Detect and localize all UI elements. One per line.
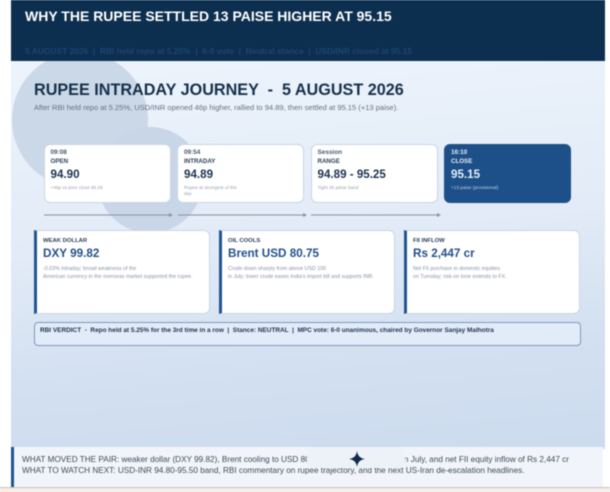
driver: weak dollar — [34, 230, 210, 314]
card: range: RANGE — [318, 158, 340, 165]
driver: oil cools: Brent USD 80.75 — [228, 246, 319, 260]
bottom strip — [0, 487, 610, 492]
card: intraday — [177, 144, 304, 203]
driver: oil cools: in July; lower crude eases India's import bill and supports INR. — [228, 274, 374, 280]
driver: oil cools — [219, 230, 395, 314]
subtitle strip: 5 AUGUST 2026 | RBI held repo at 5.25% | 6-0 vote | Neutral stance | USD/INR closed at 95.15 — [25, 46, 412, 56]
section description: After RBI held repo at 5.25%, USD/INR opened 46p higher, rallied to 94.89, then settled at 95.15 (+13 paise). — [34, 102, 398, 112]
card: open: 94.90 — [50, 168, 80, 181]
card: close: +13 paise (provisional) — [451, 185, 498, 190]
driver: weak dollar: American currency in the overseas market supported the rupee. — [43, 274, 193, 280]
card: open: OPEN — [50, 158, 68, 165]
card: intraday: 94.89 — [184, 168, 213, 181]
decorative circle small — [97, 127, 203, 233]
verdict text: RBI VERDICT - Repo held at 5.25% for the 3rd time in a row | Stance: NEUTRAL | MPC vote: 6-0 unanimous, chaired by Governor Sanjay Malhotra — [40, 326, 494, 334]
arrows between cards — [44, 212, 441, 218]
icon: sparkle — [349, 451, 365, 467]
driver: weak dollar: WEAK DOLLAR — [43, 238, 87, 244]
card: open: +46p vs prev close 95.28 — [50, 185, 103, 190]
driver: FII inflow: FII INFLOW — [413, 238, 445, 244]
driver: FII inflow: on Tuesday; risk-on tone extends to FX. — [413, 274, 507, 280]
footer line 1: WHAT MOVED THE PAIR: weaker dollar (DXY 99.82), Brent cooling to USD 80.75 from above USD 100 in July, and net FII equity inflow of Rs 2,447 cr — [22, 455, 569, 464]
card: open — [44, 144, 170, 203]
driver: oil cools: OIL COOLS — [228, 238, 260, 244]
card: range — [310, 144, 438, 203]
card: range: Session — [318, 149, 342, 156]
driver: FII inflow: Net FII purchase in domestic equities — [413, 266, 500, 272]
card: intraday: INTRADAY — [184, 158, 215, 165]
title: WHY THE RUPEE SETTLED 13 PAISE HIGHER AT 95.15 — [25, 8, 392, 24]
background panel — [11, 61, 605, 449]
driver: FII inflow — [404, 230, 580, 314]
driver: weak dollar: -0.03% intraday; broad weakness of the — [43, 266, 136, 272]
card: close — [444, 144, 571, 203]
driver: weak dollar: DXY 99.82 — [43, 246, 99, 260]
decorative circle large — [12, 52, 148, 188]
card: intraday: 09:54 — [184, 149, 200, 156]
card: range: 94.89 - 95.25 — [318, 168, 386, 181]
RBI verdict bar — [34, 322, 581, 346]
watermark patch — [307, 447, 405, 468]
card: open: 09:08 — [50, 149, 67, 156]
card: close: CLOSE — [451, 158, 472, 165]
card: close: 95.15 — [451, 168, 480, 181]
driver: FII inflow: Rs 2,447 cr — [413, 246, 475, 260]
section heading: RUPEE INTRADAY JOURNEY - 5 AUGUST 2026 — [34, 81, 404, 99]
footer panel — [11, 447, 603, 486]
card: intraday: Rupee at strongest of the day — [184, 185, 237, 196]
footer line 2: WHAT TO WATCH NEXT: USD-INR 94.80-95.50 band, RBI commentary on rupee trajectory, and the next US-Iran de-escalation headlines. — [22, 466, 525, 474]
driver: oil cools: Crude down sharply from above USD 100 — [228, 266, 326, 272]
card: range: Tight 36 paise band — [318, 185, 359, 190]
header band — [11, 0, 605, 61]
card: close: 16:10 — [451, 149, 467, 156]
